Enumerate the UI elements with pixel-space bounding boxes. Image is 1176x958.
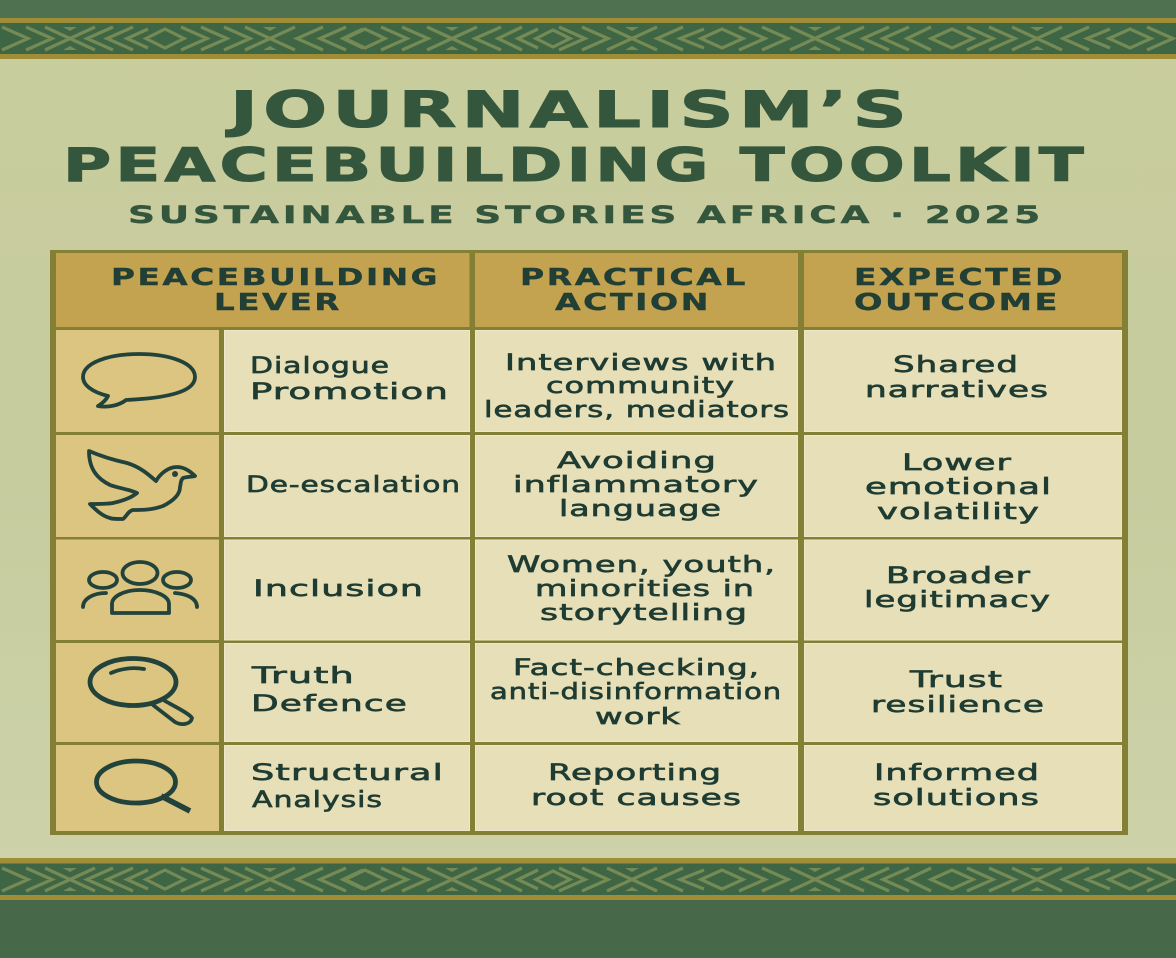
title: JOURNALISM’S bbox=[225, 81, 912, 139]
title: PEACEBUILDING TOOLKIT bbox=[63, 138, 1088, 192]
header row: OUTCOME bbox=[854, 290, 1060, 316]
row 4: truth defence: resilience bbox=[871, 692, 1045, 718]
row 2: de-escalation: Avoiding bbox=[557, 448, 717, 474]
header row bbox=[56, 253, 1122, 327]
row 3: inclusion: Women, youth, bbox=[507, 552, 776, 578]
row 1: dialogue promotion: narratives bbox=[865, 377, 1049, 403]
icon: magnifying glass with highlight bbox=[90, 658, 192, 724]
icon: magnifying glass bbox=[96, 761, 190, 811]
header row: PRACTICAL bbox=[520, 265, 748, 291]
row 5: structural analysis: Reporting bbox=[548, 760, 722, 786]
row 1: dialogue promotion: Promotion bbox=[250, 379, 449, 405]
row 2: de-escalation: emotional bbox=[865, 474, 1052, 500]
table frame bbox=[50, 250, 1128, 835]
row 1: dialogue promotion: community bbox=[546, 373, 735, 399]
icon: speech bubble bbox=[83, 354, 195, 407]
row 4: truth defence: work bbox=[595, 704, 681, 730]
header row: PEACEBUILDING bbox=[111, 265, 440, 291]
row 1: dialogue promotion: Shared bbox=[893, 352, 1019, 378]
row 1: dialogue promotion: Interviews with bbox=[505, 350, 777, 376]
row 5: structural analysis bbox=[56, 745, 1122, 831]
icon: dove bbox=[89, 451, 195, 519]
row 4: truth defence: anti-disinformation bbox=[490, 679, 782, 705]
row 2: de-escalation: inflammatory bbox=[513, 472, 759, 498]
row 2: de-escalation: De-escalation bbox=[246, 472, 461, 498]
table bbox=[50, 250, 1128, 835]
row 4: truth defence bbox=[56, 643, 1122, 742]
row 4: truth defence: Fact-checking, bbox=[513, 655, 760, 681]
title bbox=[63, 81, 1088, 192]
row 5: structural analysis: Structural bbox=[251, 760, 444, 786]
row 5: structural analysis: root causes bbox=[531, 785, 742, 811]
subtitle: SUSTAINABLE STORIES AFRICA · 2025 bbox=[128, 201, 1044, 229]
bottom decorative band bbox=[0, 858, 1176, 958]
row 3: inclusion: Broader bbox=[886, 563, 1031, 589]
row 1: dialogue promotion: leaders, mediators bbox=[484, 397, 790, 423]
row 3: inclusion bbox=[56, 540, 1122, 640]
row 5: structural analysis: Informed bbox=[874, 760, 1040, 786]
row 2: de-escalation: Lower bbox=[902, 450, 1012, 476]
header row: EXPECTED bbox=[854, 265, 1065, 291]
row 5: structural analysis: Analysis bbox=[252, 787, 383, 813]
row 4: truth defence: Trust bbox=[908, 667, 1003, 693]
row 3: inclusion: storytelling bbox=[540, 600, 748, 626]
row 3: inclusion: legitimacy bbox=[864, 587, 1051, 613]
row 3: inclusion: Inclusion bbox=[253, 576, 424, 602]
top decorative band bbox=[0, 0, 1176, 59]
row 2: de-escalation: language bbox=[559, 496, 722, 522]
header row: LEVER bbox=[214, 290, 342, 316]
row 2: de-escalation bbox=[56, 435, 1122, 537]
row 4: truth defence: Defence bbox=[251, 691, 408, 717]
row 2: de-escalation: volatility bbox=[877, 499, 1040, 525]
row 1: dialogue promotion bbox=[56, 330, 1122, 432]
row 5: structural analysis: solutions bbox=[873, 785, 1040, 811]
row 3: inclusion: minorities in bbox=[535, 576, 755, 602]
row 4: truth defence: Truth bbox=[250, 663, 355, 689]
row 1: dialogue promotion: Dialogue bbox=[250, 353, 390, 379]
header row: ACTION bbox=[555, 290, 711, 316]
icon: people group bbox=[83, 562, 197, 613]
